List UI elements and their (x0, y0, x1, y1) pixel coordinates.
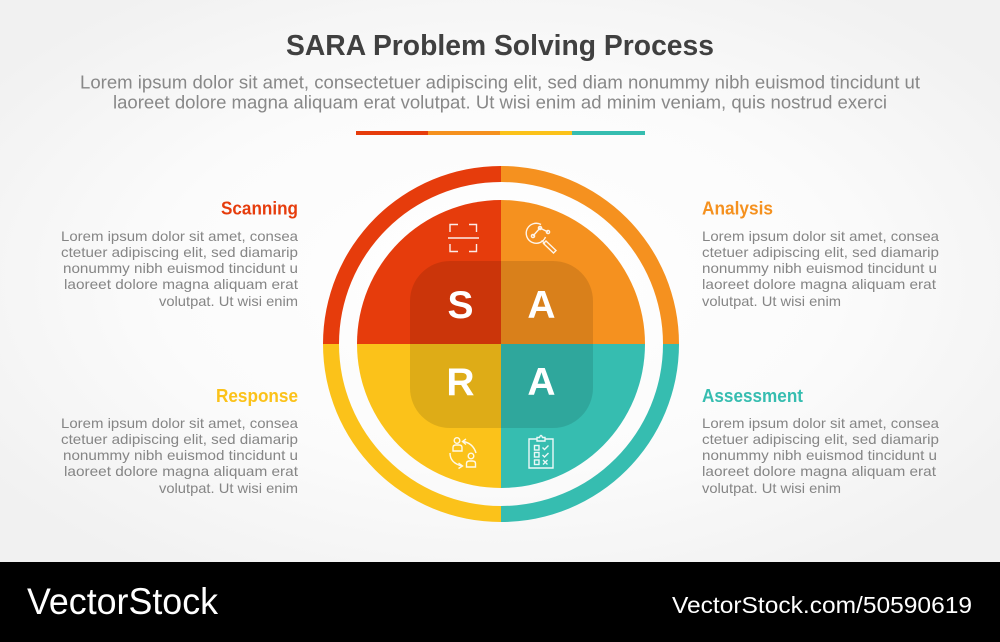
text block: analysis: laoreet dolore magna aliquam erat (702, 276, 936, 292)
subtitle text (80, 72, 920, 112)
text block: analysis: Lorem ipsum dolor sit amet, consea (702, 228, 939, 244)
letter S: S (447, 284, 474, 327)
watermark logo: VectorStock (27, 581, 218, 622)
text block: assessment: ctetuer adipiscing elit, sed diamarip (702, 431, 939, 447)
icon: scan frame (448, 224, 479, 252)
panel: response text (61, 386, 298, 496)
heading: response: Response (216, 386, 298, 406)
panel: assessment text (702, 386, 939, 496)
text block: assessment (702, 415, 939, 496)
title: SARA Problem Solving Process (286, 30, 714, 62)
centre rounded square (410, 261, 593, 428)
icon: clipboard checklist (529, 436, 553, 468)
text block: scanning: laoreet dolore magna aliquam erat (64, 276, 298, 292)
text block: scanning: nonummy nibh euismod tincidunt u (63, 260, 298, 276)
heading: analysis: Analysis (702, 198, 773, 218)
text block: scanning: volutpat. Ut wisi enim (159, 293, 298, 309)
colour divider (356, 131, 645, 135)
subtitle text: laoreet dolore magna aliquam erat volutpat. Ut wisi enim ad minim veniam, quis nostrud exerci (113, 92, 887, 112)
letter A (analysis): A (527, 284, 556, 327)
text block: scanning: Lorem ipsum dolor sit amet, consea (61, 228, 298, 244)
panel: scanning text (61, 198, 298, 309)
text block: response: laoreet dolore magna aliquam erat (64, 463, 298, 479)
footer bar (0, 562, 1000, 642)
heading: assessment: Assessment (702, 386, 803, 406)
circular SARA diagram (323, 166, 679, 522)
outer ring (323, 166, 679, 522)
text block: response: Lorem ipsum dolor sit amet, consea (61, 415, 298, 431)
watermark URL: VectorStock.com/50590619 (672, 592, 972, 618)
text block: response: volutpat. Ut wisi enim (159, 480, 298, 496)
subtitle text: Lorem ipsum dolor sit amet, consectetuer adipiscing elit, sed diam nonummy nibh euismod tincidunt ut (80, 72, 920, 92)
text block: analysis: nonummy nibh euismod tincidunt u (702, 260, 937, 276)
text block: response: ctetuer adipiscing elit, sed diamarip (61, 431, 298, 447)
text block: scanning (61, 228, 298, 309)
text block: analysis (702, 228, 939, 309)
text block: assessment: volutpat. Ut wisi enim (702, 480, 841, 496)
panel: analysis text (702, 198, 939, 309)
icon: response people cycle (450, 438, 476, 468)
text block: analysis: ctetuer adipiscing elit, sed diamarip (702, 244, 939, 260)
text block: assessment: nonummy nibh euismod tincidunt u (702, 447, 937, 463)
text block: response (61, 415, 298, 496)
text block: scanning: ctetuer adipiscing elit, sed diamarip (61, 244, 298, 260)
quadrant pie (357, 200, 645, 488)
text block: response: nonummy nibh euismod tincidunt u (63, 447, 298, 463)
text block: assessment: laoreet dolore magna aliquam erat (702, 463, 936, 479)
text block: assessment: Lorem ipsum dolor sit amet, consea (702, 415, 939, 431)
icon: magnifier analysis (526, 223, 556, 253)
letter A (assessment): A (527, 361, 556, 404)
text block: analysis: volutpat. Ut wisi enim (702, 293, 841, 309)
heading: scanning: Scanning (221, 198, 298, 218)
letter R: R (446, 361, 475, 404)
